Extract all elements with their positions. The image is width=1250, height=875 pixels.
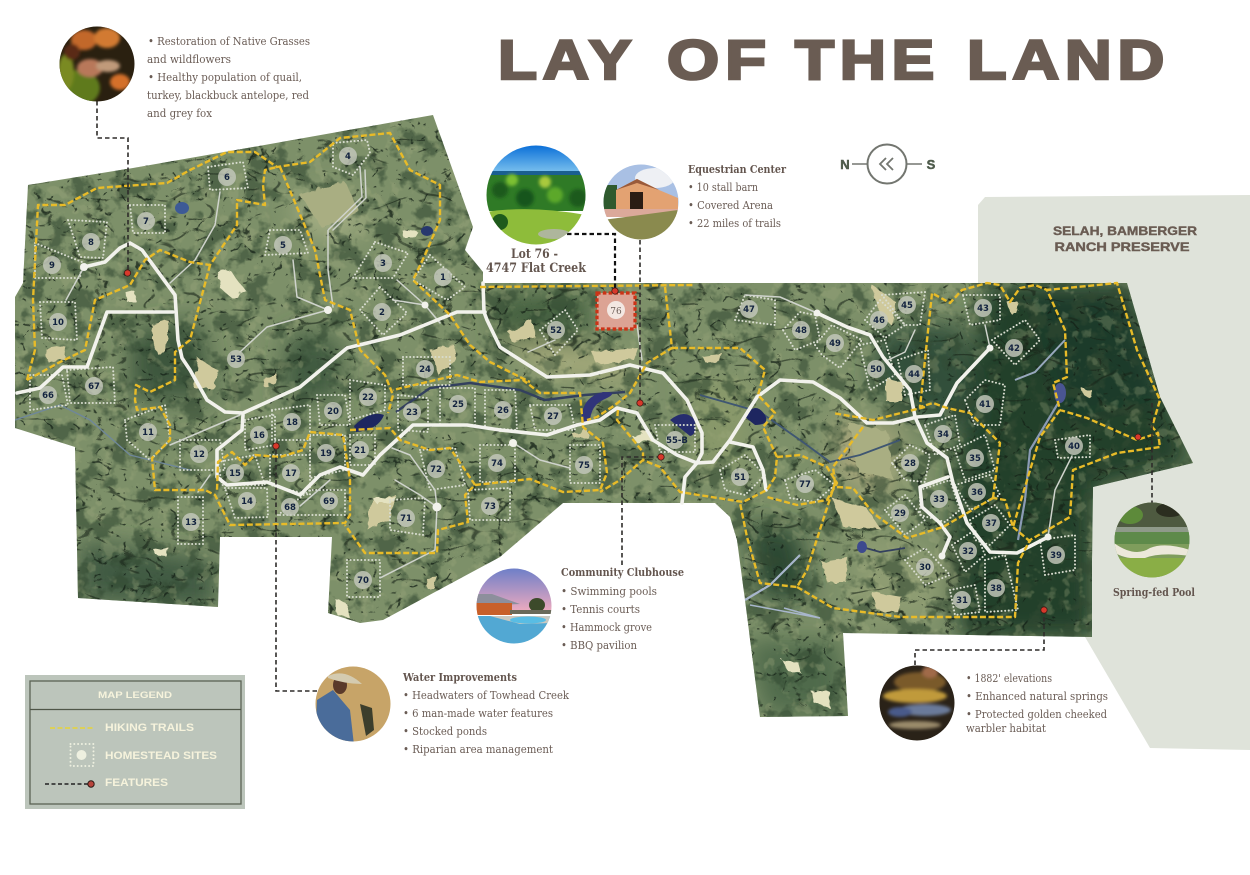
connector: elevations (915, 607, 1047, 665)
text: equestrian center: • Covered Arena (688, 198, 773, 212)
lot 13 (182, 513, 200, 531)
lot 1 (434, 268, 452, 286)
label: lot 76: 4747 Flat Creek (486, 261, 587, 276)
lot 3 (374, 254, 392, 272)
lot 74 (488, 454, 506, 472)
lot 18 (283, 413, 301, 431)
connector: spring-fed pool (1135, 400, 1152, 505)
lot 45 (898, 296, 916, 314)
text: community clubhouse: • Swimming pools (561, 584, 657, 598)
lot 48: 48 (795, 326, 807, 336)
lot 38 (987, 579, 1005, 597)
lot 47 (740, 300, 758, 318)
lot 40 (1065, 437, 1083, 455)
lot 73: 73 (484, 502, 496, 512)
lot 31: 31 (956, 596, 968, 606)
text: wildlife and grasses: turkey, blackbuck antelope, red (147, 88, 310, 102)
lot 72 (427, 460, 445, 478)
lot 21 (351, 441, 369, 459)
lot 42 (1005, 339, 1023, 357)
lot 33: 33 (933, 495, 945, 505)
label: lot 76: Lot 76 - (511, 247, 558, 262)
lot 3: 3 (380, 259, 386, 269)
lot 66 (39, 386, 57, 404)
lot 6: 6 (224, 173, 230, 183)
title (498, 28, 1170, 91)
text: equestrian center: Equestrian Center (688, 162, 787, 176)
map of the ranch (0, 100, 1210, 730)
lot 8: 8 (88, 238, 94, 248)
lot 41 (976, 395, 994, 413)
lot 12 (190, 445, 208, 463)
lot 36 (968, 483, 986, 501)
map legend: MAP LEGEND (98, 690, 172, 701)
lot 44 (905, 365, 923, 383)
lot 72: 72 (430, 465, 442, 475)
water features and creeks (15, 202, 1066, 618)
lot 9: 9 (49, 261, 55, 271)
connector: water improvements (273, 443, 317, 691)
lot 40: 40 (1068, 442, 1080, 452)
lot 67 (85, 377, 103, 395)
text: wildlife and grasses: • Restoration of Native Grasses (148, 34, 310, 48)
lot 44: 44 (908, 370, 920, 380)
hiking trails (27, 133, 1160, 617)
text: water improvements: Water Improvements (402, 670, 517, 684)
photo: butterflies (60, 26, 134, 102)
label: lot 76 (486, 247, 587, 276)
lot 26: 26 (497, 406, 509, 416)
lot 15 (226, 464, 244, 482)
lot 19 (317, 444, 335, 462)
lot 12: 12 (193, 450, 205, 460)
lot 27 (544, 407, 562, 425)
lot 52 (547, 321, 565, 339)
legend: homestead sites (70, 744, 217, 766)
lot 8 (82, 233, 100, 251)
text: wildlife and grasses: and wildflowers (147, 52, 231, 66)
lot 43: 43 (977, 304, 989, 314)
map legend (25, 675, 245, 809)
text: wildlife and grasses: • Healthy population of quail, (148, 70, 302, 84)
connector: clubhouse (622, 454, 664, 565)
connector: wildlife (97, 101, 131, 276)
connector: lot 76 (567, 234, 618, 294)
lot 74: 74 (491, 459, 503, 469)
lot 52: 52 (550, 326, 562, 336)
lot 11: 11 (142, 428, 154, 438)
lot 20: 20 (327, 407, 339, 417)
homestead site outlines (30, 140, 1090, 615)
lot 70 (354, 571, 372, 589)
lot 23 (403, 403, 421, 421)
lot 11 (139, 423, 157, 441)
label: spring-fed pool: Spring-fed Pool (1113, 585, 1196, 599)
text: wildlife and grasses: and grey fox (147, 106, 212, 120)
lot 28: 28 (904, 459, 916, 469)
lot 38: 38 (990, 584, 1002, 594)
lot 13: 13 (185, 518, 197, 528)
lot 20 (324, 402, 342, 420)
lot 24 (416, 360, 434, 378)
lot 5: 5 (280, 241, 286, 251)
connector: equestrian center (637, 240, 643, 406)
text: community clubhouse: • BBQ pavilion (561, 638, 638, 652)
photo: barn (603, 164, 679, 240)
text: community clubhouse: • Tennis courts (561, 602, 640, 616)
lot 34: 34 (937, 430, 949, 440)
lot 53 (227, 350, 245, 368)
lot 17 (282, 464, 300, 482)
lot 14: 14 (241, 497, 253, 507)
lot 45: 45 (901, 301, 913, 311)
lot 35 (966, 449, 984, 467)
panel: Selah, Bamberger Ranch Preserve (978, 195, 1250, 750)
legend: features: FEATURES (105, 777, 168, 789)
text: water improvements: • Headwaters of Towhead Creek (403, 688, 570, 702)
lot 5 (274, 236, 292, 254)
lot 7 (137, 212, 155, 230)
lot 27: 27 (547, 412, 559, 422)
lot 22: 22 (362, 393, 374, 403)
legend: features (45, 777, 168, 789)
lot 2 (373, 303, 391, 321)
lot 46 (870, 311, 888, 329)
lot 50: 50 (870, 365, 882, 375)
text: water improvements: • 6 man-made water features (403, 706, 553, 720)
lot 9 (43, 256, 61, 274)
lot 53: 53 (230, 355, 242, 365)
lot 1: 1 (440, 273, 446, 283)
text: water improvements: • Riparian area management (403, 742, 553, 756)
lot 66: 66 (42, 391, 54, 401)
lot 32: 32 (962, 547, 974, 557)
lot 25: 25 (452, 400, 464, 410)
lot 55-B: 55-B (666, 436, 688, 446)
text: community clubhouse: Community Clubhouse (561, 565, 684, 579)
lot 10: 10 (52, 318, 64, 328)
lot 73 (481, 497, 499, 515)
text: water improvements (402, 670, 570, 756)
lot 67: 67 (88, 382, 100, 392)
photo: spring-fed pool (1114, 502, 1190, 578)
lot 51 (731, 468, 749, 486)
lot 69 (320, 492, 338, 510)
photo: man with fish (315, 666, 391, 745)
lot 30 (916, 558, 934, 576)
lot 68 (281, 498, 299, 516)
numbered lot markers (39, 147, 1083, 609)
lot 76 highlight (597, 293, 635, 329)
lot 39 (1047, 546, 1065, 564)
lot 22 (359, 388, 377, 406)
lot 24: 24 (419, 365, 431, 375)
lot 36: 36 (971, 488, 983, 498)
lot 29: 29 (894, 509, 906, 519)
lot 18: 18 (286, 418, 298, 428)
lot 19: 19 (320, 449, 332, 459)
lot 10 (49, 313, 67, 331)
lot 14 (238, 492, 256, 510)
lot 71 (397, 509, 415, 527)
text: elevations and springs: • Enhanced natural springs (966, 689, 1108, 703)
lot 23: 23 (406, 408, 418, 418)
lot 71: 71 (400, 514, 412, 524)
lot 50 (867, 360, 885, 378)
lot 25 (449, 395, 467, 413)
title: LAND (967, 28, 1170, 91)
lot 47: 47 (743, 305, 755, 315)
legend: homestead sites: HOMESTEAD SITES (105, 750, 217, 762)
text: community clubhouse (561, 565, 684, 652)
text: equestrian center (688, 162, 787, 230)
lot 76 highlight: 76 (610, 307, 622, 317)
lot 68: 68 (284, 503, 296, 513)
lot 16 (250, 426, 268, 444)
text: equestrian center: • 22 miles of trails (688, 216, 781, 230)
text: water improvements: • Stocked ponds (403, 724, 487, 738)
text: equestrian center: • 10 stall barn (688, 180, 758, 194)
lot 49: 49 (829, 339, 841, 349)
text: elevations and springs: warbler habitat (966, 721, 1046, 735)
lot 16: 16 (253, 431, 265, 441)
title: OF (667, 28, 772, 91)
text: wildlife and grasses (147, 34, 310, 120)
title: THE (795, 28, 940, 91)
lot 75 (575, 456, 593, 474)
lot 49 (826, 334, 844, 352)
lot 37 (982, 514, 1000, 532)
text: elevations and springs (966, 671, 1108, 735)
lot 46: 46 (873, 316, 885, 326)
lot 7: 7 (143, 217, 149, 227)
lot 15: 15 (229, 469, 241, 479)
road junctions (80, 263, 1052, 560)
tan clearings (45, 182, 1093, 708)
text: elevations and springs: • Protected golden cheeked (966, 707, 1108, 721)
title: LAY (498, 28, 637, 91)
lot 21: 21 (354, 446, 366, 456)
lot 75: 75 (578, 461, 590, 471)
lot 30: 30 (919, 563, 931, 573)
main roads (17, 243, 1052, 560)
compass: S (927, 157, 936, 172)
photo: clubhouse (476, 568, 552, 644)
lot 34 (934, 425, 952, 443)
lot 37: 37 (985, 519, 997, 529)
lot 28 (901, 454, 919, 472)
lot 33 (930, 490, 948, 508)
lot 6 (218, 168, 236, 186)
text: community clubhouse: • Hammock grove (561, 620, 652, 634)
lot 32 (959, 542, 977, 560)
panel: Selah, Bamberger Ranch Preserve: RANCH PRESERVE (1054, 240, 1190, 254)
map terrain (0, 100, 1210, 730)
legend: hiking trails: HIKING TRAILS (105, 722, 194, 734)
photo: waterfall (879, 665, 955, 741)
panel: Selah, Bamberger Ranch Preserve: SELAH, BAMBERGER (1053, 224, 1197, 238)
lot 29 (891, 504, 909, 522)
compass: N (840, 157, 850, 172)
lot 77: 77 (799, 480, 811, 490)
text: elevations and springs: • 1882' elevations (966, 671, 1052, 685)
lot 17: 17 (285, 469, 297, 479)
lot 35: 35 (969, 454, 981, 464)
lot 43 (974, 299, 992, 317)
compass (840, 144, 936, 184)
lot 48 (792, 321, 810, 339)
photo: lot 76 view (486, 145, 587, 245)
lot 77 (796, 475, 814, 493)
lot 51: 51 (734, 473, 746, 483)
lot 31 (953, 591, 971, 609)
lot 26 (494, 401, 512, 419)
lot 39: 39 (1050, 551, 1062, 561)
lot 41: 41 (979, 400, 991, 410)
lot 2: 2 (379, 308, 385, 318)
lot 69: 69 (323, 497, 335, 507)
lot 42: 42 (1008, 344, 1020, 354)
lot 70: 70 (357, 576, 369, 586)
lot 4 (339, 147, 357, 165)
lot 4: 4 (345, 152, 351, 162)
thin access roads (66, 167, 1072, 578)
lot 55-B (666, 431, 688, 449)
